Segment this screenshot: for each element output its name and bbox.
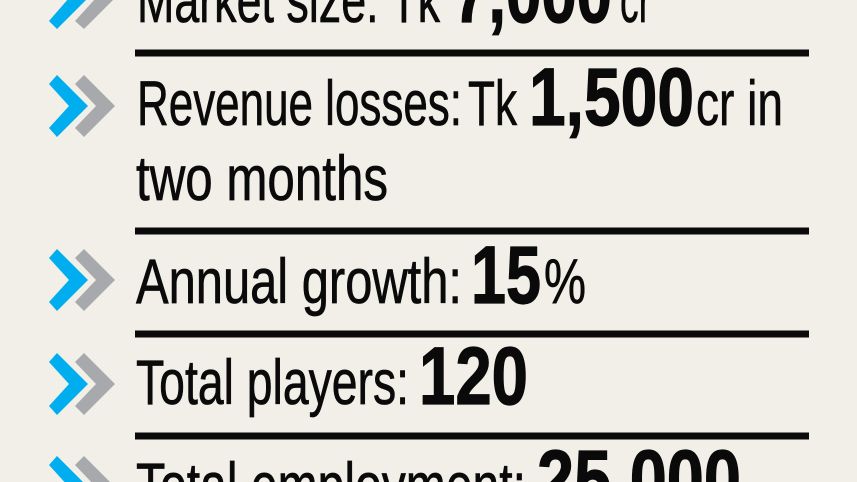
text: annual growth value: % xyxy=(544,247,586,317)
icon: double chevron market size xyxy=(49,0,115,29)
text: revenue losses value: Revenue losses: xyxy=(137,69,462,139)
list item: annual growth xyxy=(49,230,586,321)
text: revenue losses value: Tk xyxy=(468,69,517,139)
text: annual growth value: 15 xyxy=(471,230,541,321)
icon: double chevron annual growth xyxy=(49,249,115,311)
icon: double chevron revenue losses xyxy=(49,75,115,137)
text: revenue losses value: 1,500 xyxy=(529,52,694,143)
text: total players value: 120 xyxy=(419,331,528,422)
list item: total players xyxy=(49,331,528,422)
list item: market size xyxy=(49,0,651,40)
icon: double chevron total employment xyxy=(49,456,115,482)
text: total employment value xyxy=(136,434,741,482)
text: revenue losses value: two months xyxy=(136,144,388,214)
list item: revenue losses xyxy=(49,52,783,214)
icon: double chevron total players xyxy=(49,353,115,415)
list item: total employment xyxy=(49,434,741,482)
text: annual growth value: Annual growth: xyxy=(136,247,462,317)
text: total players value: Total players: xyxy=(136,348,409,418)
text: revenue losses value: cr in xyxy=(696,69,783,139)
text: revenue losses value xyxy=(136,52,783,214)
